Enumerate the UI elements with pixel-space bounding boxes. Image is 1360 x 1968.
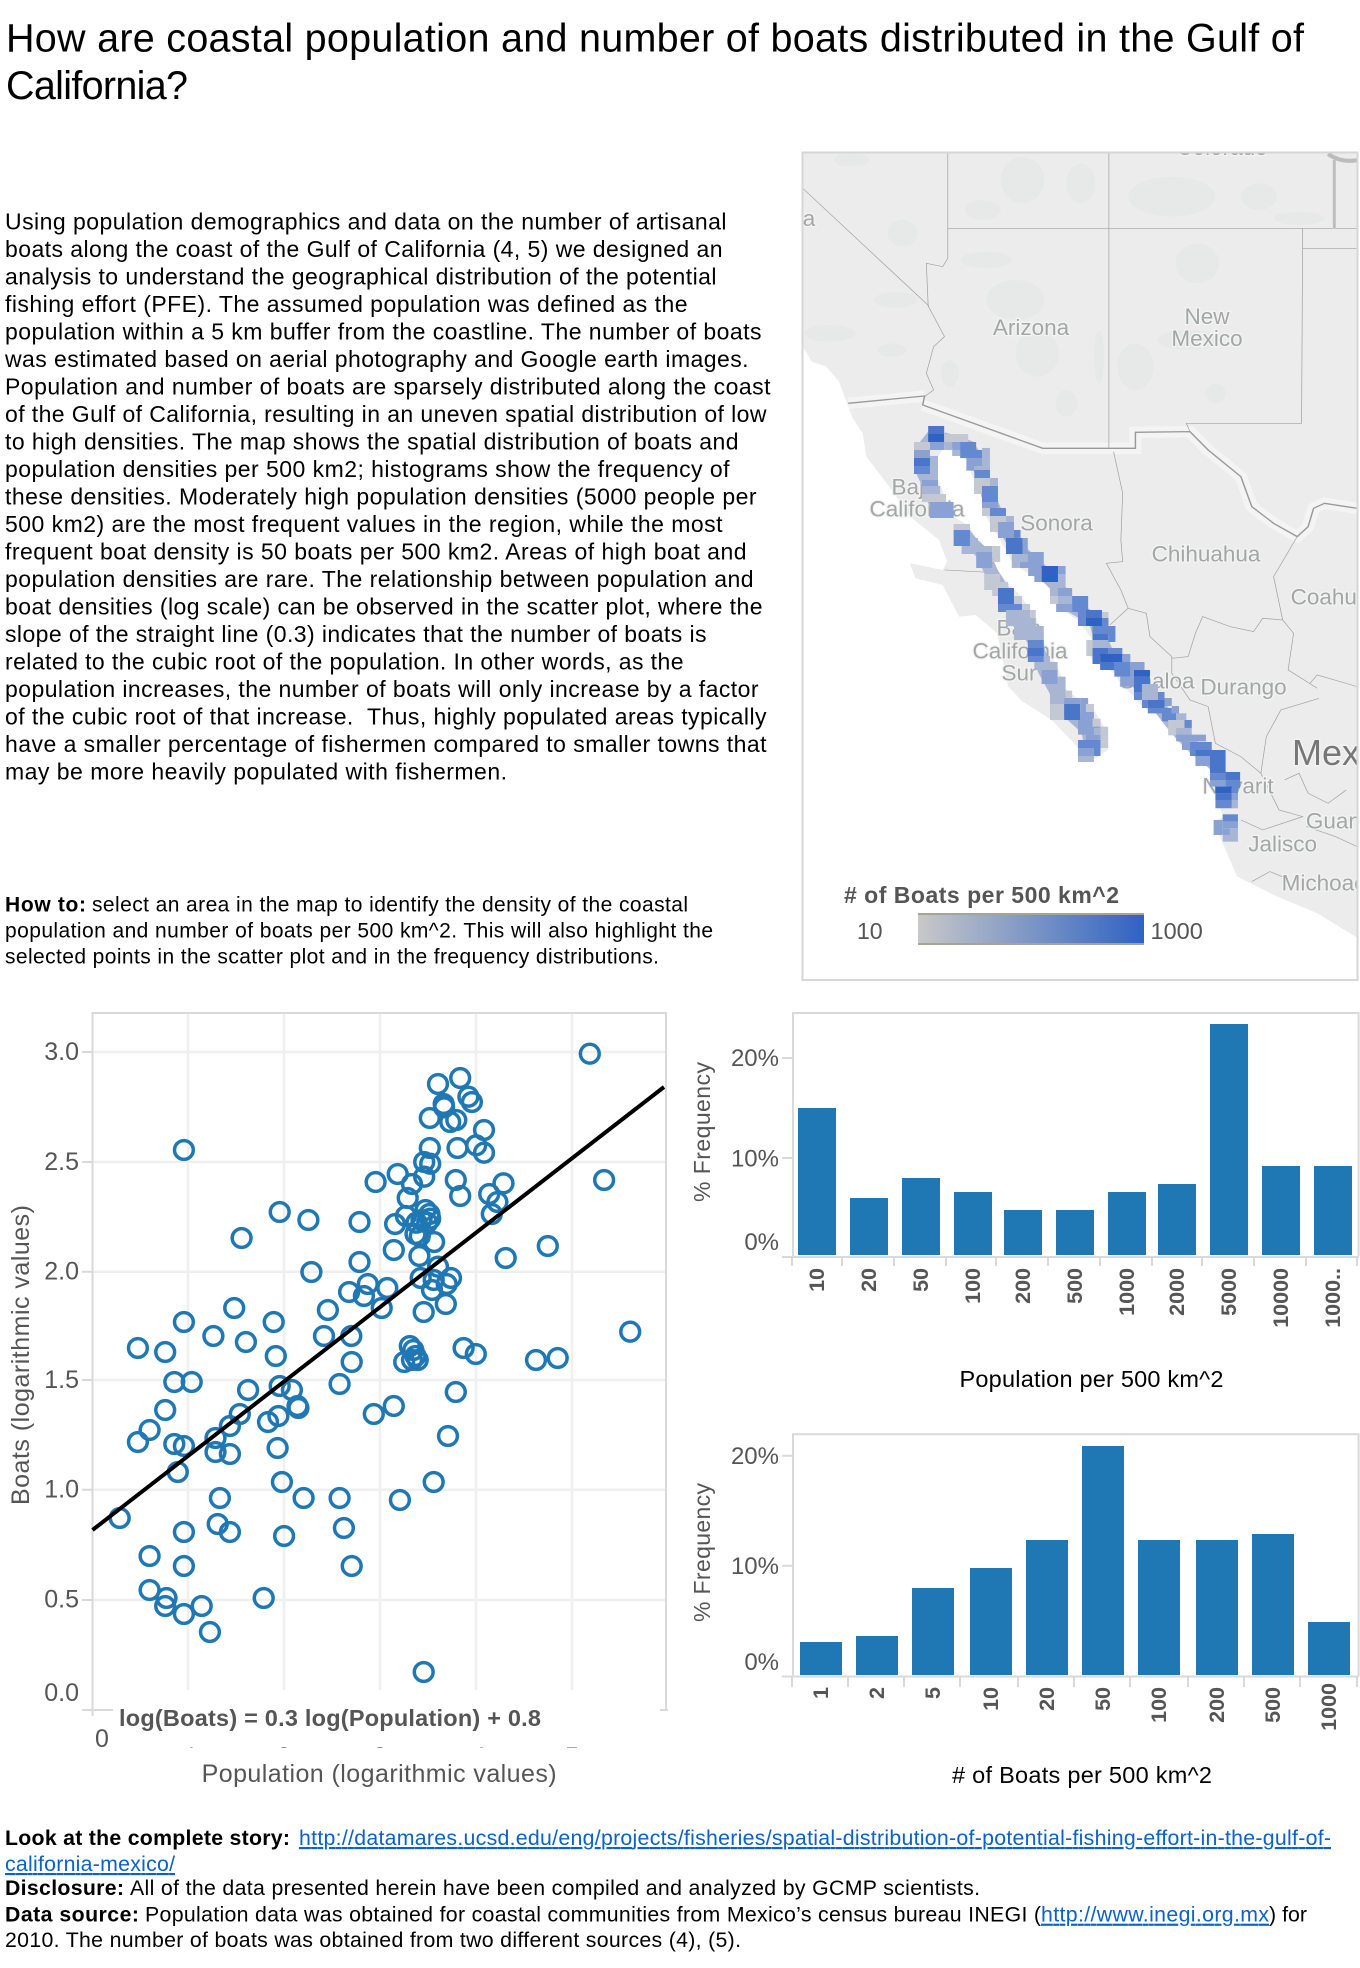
category labels: 50 [909,1268,933,1292]
map labels: Durango [1200,674,1287,700]
map labels: California [972,638,1068,664]
text block: analysis description: of the Gulf of California, resulting in an uneven spatial distribution of low [5,401,767,427]
bars [800,1446,1350,1675]
footer: sources: Data source: [5,1903,139,1927]
y axis labels: 10% [731,1553,779,1580]
y axis title: Boats (logarithmic values) [7,1205,35,1505]
map labels: Jalisco [1248,832,1317,856]
category labels: 200 [1205,1687,1229,1723]
map labels: Sur [1001,660,1037,686]
heat cells: northern gulf [914,426,1044,568]
category labels: 1000 [1317,1683,1341,1731]
y axis labels [731,1443,779,1676]
category labels: 50 [1091,1687,1115,1711]
text block: analysis description: analysis to understand the geographical distribution of the potential [5,264,716,290]
scatter points [110,1044,640,1681]
title: How are coastal population and number of boats distributed in the Gulf of [6,17,1305,61]
footer: sources [5,1826,1331,1952]
text block: analysis description: slope of the straight line (0.3) indicates that the number of boats is [5,621,706,647]
text block: analysis description: was estimated based on aerial photography and Google earth images. [4,346,748,372]
footer: sources: All of the data presented herein have been compiled and analyzed by GCMP scientists. [130,1876,980,1900]
category labels: 20 [1035,1687,1059,1711]
text block: analysis description: population densities are rare. The relationship between population and [5,566,754,592]
category labels: 100 [1147,1687,1171,1723]
map legend: 10 [857,918,883,944]
footer: sources: ) for [1269,1903,1307,1927]
footer: sources: 2010. The number of boats was obtained from two different sources (4), (5). [5,1928,741,1952]
category labels: 2000 [1165,1268,1189,1316]
text block: how to: selected points in the scatter plot and in the frequency distributions. [5,945,659,968]
text block: analysis description: frequent boat density is 50 boats per 500 km2. Areas of high boat and [5,538,746,564]
text block: analysis description: 500 km2) are the most frequent values in the region, while the most [5,511,723,537]
text block: analysis description [4,208,771,784]
map labels: Sinaloa [1119,668,1195,694]
y axis labels: 20% [731,1045,779,1072]
map labels: New [1184,304,1230,329]
map legend: 1000 [1150,918,1203,944]
text block: how to: How to: [5,894,86,917]
category labels: 10 [979,1687,1003,1711]
map labels: Chihuahua [1152,542,1261,566]
scatter plot [7,1013,668,1788]
text block: analysis description: population increases, the number of boats will only increase by a factor [5,676,759,702]
text block: analysis description: boat densities (log scale) can be observed in the scatter plot, where the [5,594,762,620]
footer: sources: http://www.inegi.org.mx [1041,1903,1269,1927]
scatter gridlines [82,1013,668,1716]
y axis labels: 0.5 [44,1586,79,1614]
y axis labels: 2.5 [44,1148,79,1176]
text block: how to [5,894,713,968]
map legend [844,882,1203,945]
category labels [809,1683,1341,1731]
map labels [803,135,1360,896]
text block: analysis description: population within a 5 km buffer from the coastline. The number of boats [5,318,762,344]
y axis labels: 2.0 [44,1258,79,1286]
text block: analysis description: population densities per 500 km2; histograms show the frequency of [5,456,730,482]
map labels: Baja [996,616,1042,640]
frame and axis [782,1434,1359,1687]
histogram: boat frequency [689,1434,1359,1788]
category labels: 10 [805,1268,829,1292]
map labels: Mexico [1171,326,1243,351]
category labels: 100 [961,1268,985,1304]
y axis labels: 10% [731,1146,779,1172]
y axis labels: 0.0 [44,1679,79,1707]
y axis labels: 3.0 [44,1038,79,1066]
terrain and coast base map [803,153,1360,1007]
category labels: 500 [1261,1687,1285,1723]
title: California? [6,64,188,108]
category labels: 5000 [1217,1268,1241,1316]
bars [798,1024,1352,1255]
text block: analysis description: of the cubic root of that increase. Thus, highly populated areas typically [5,704,767,730]
category labels: 1000 [1115,1268,1139,1316]
text block: analysis description: may be more heavily populated with fishermen. [5,758,507,784]
text block: analysis description: Population and number of boats are sparsely distributed along the coast [5,374,771,400]
footer: sources: http://datamares.ucsd.edu/eng/projects/fisheries/spatial-distribution-of-potential-fishing-effort-in-the-gulf-of- [299,1826,1331,1850]
x axis labels: 1 [184,1743,198,1771]
footer: sources: Disclosure: [5,1876,124,1900]
text block: how to: select an area in the map to identify the density of the coastal [92,894,688,917]
category labels: 20 [857,1268,881,1292]
y axis labels [44,1038,79,1707]
category labels: 5 [921,1687,945,1699]
map labels: California [869,496,965,522]
text block: analysis description: these densities. Moderately high population densities (5000 people per [5,484,757,510]
y axis title: % Frequency [689,1482,715,1622]
category labels: 200 [1011,1268,1035,1304]
x axis labels: 4 [472,1743,486,1771]
category labels: 10000 [1269,1268,1293,1328]
category labels: 2 [865,1687,889,1699]
histogram: population frequency [689,1013,1359,1392]
y axis labels: 1.5 [44,1366,79,1394]
category labels: 1000.. [1321,1268,1345,1328]
category labels [805,1268,1345,1328]
map labels: Colorado [1176,135,1268,160]
text block: how to: population and number of boats per 500 km^2. This will also highlight the [5,920,713,942]
category labels: 1 [809,1687,833,1699]
footer: sources: california-mexico/ [5,1852,175,1876]
title [6,17,1305,108]
map labels: a [803,206,816,231]
heat cells: southern gulf [984,566,1240,842]
x axis labels: 0 [95,1725,109,1753]
footer: sources: Population data was obtained for coastal communities from Mexico’s census bureau INEGI ( [145,1903,1041,1927]
panel: map of boat density [804,154,1356,937]
map frame [802,152,1358,980]
heat strip underlay [922,433,1226,807]
text block: analysis description: related to the cubic root of the population. In other words, as the [5,648,684,674]
y axis labels: 0% [744,1649,779,1676]
text block: analysis description: Using population demographics and data on the number of artisanal [5,208,726,234]
x axis title: Population (logarithmic values) [202,1760,557,1788]
x axis labels: 3 [373,1743,387,1771]
y axis title: % Frequency [689,1062,715,1202]
map labels: Sonora [1020,510,1093,536]
text block: analysis description: fishing effort (PFE). The assumed population was defined as the [5,291,688,317]
y axis labels: 1.0 [44,1476,79,1504]
footer: sources: Look at the complete story: [5,1826,290,1850]
x axis labels: 5 [565,1743,579,1771]
text block: analysis description: boats along the coast of the Gulf of California (4, 5) we designed an [5,236,722,262]
x axis title: # of Boats per 500 km^2 [952,1762,1212,1788]
x axis title: Population per 500 km^2 [960,1366,1224,1392]
trend equation: log(Boats) = 0.3 log(Population) + 0.8 [119,1705,541,1731]
text block: analysis description: have a smaller percentage of fishermen compared to smaller towns that [5,731,767,757]
x axis labels [96,1729,577,1748]
frame and axis [782,1013,1359,1266]
y axis labels: 20% [731,1443,779,1470]
map labels: Nayarit [1202,774,1274,798]
map labels: Baja [891,474,937,500]
text block: analysis description: to high densities. The map shows the spatial distribution of boats and [5,428,738,454]
x axis labels: 2 [277,1743,291,1771]
map legend: # of Boats per 500 km^2 [844,882,1119,908]
category labels: 500 [1063,1268,1087,1304]
y axis labels [731,1045,779,1256]
trend line [92,1087,664,1530]
y axis labels: 0% [744,1229,779,1256]
map labels: Arizona [993,315,1070,340]
